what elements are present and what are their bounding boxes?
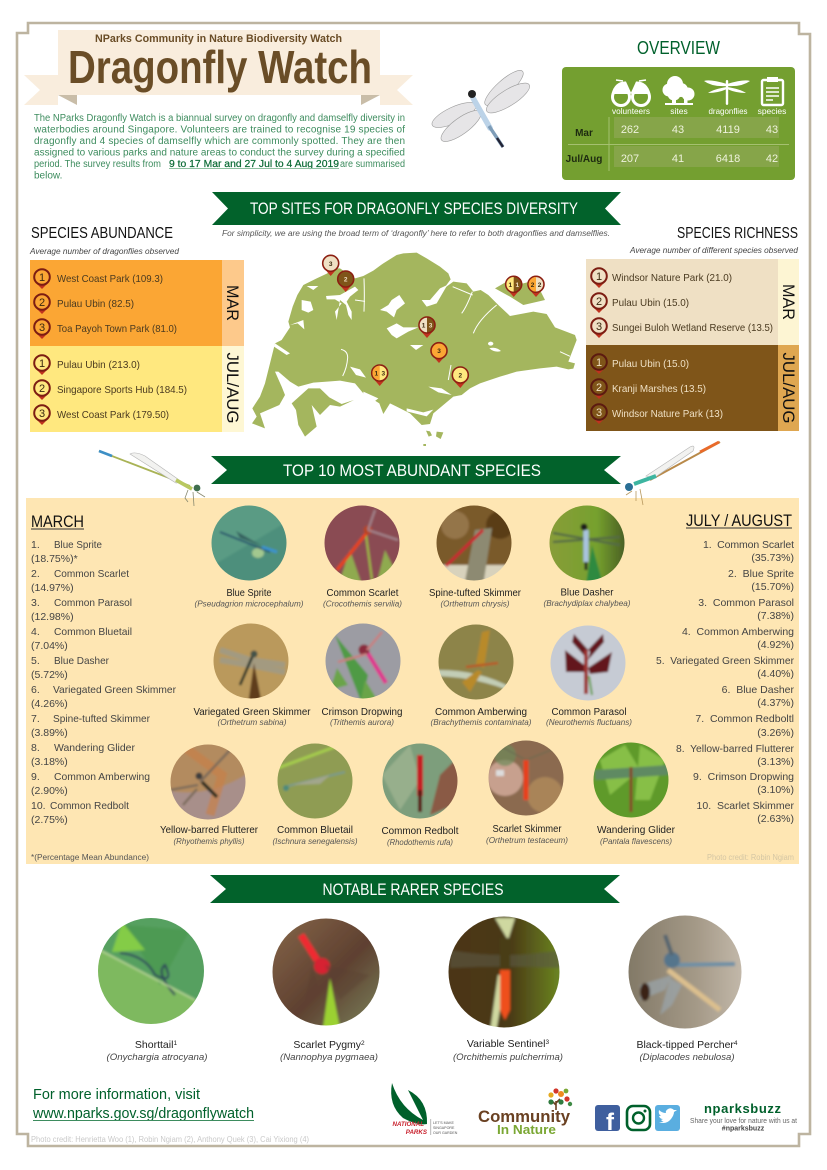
- July/August heading: JULY / AUGUST: [686, 512, 792, 530]
- species captions: bottom row: Common Bluetail: [277, 824, 353, 836]
- overview panel: [562, 67, 795, 180]
- map pin: Toa Payoh 3: [431, 343, 447, 363]
- panel: richness March: MAR: [779, 284, 798, 320]
- March ranks: Spine-tufted Skimmer: [53, 713, 150, 725]
- species captions: middle row: Common Parasol: [552, 706, 626, 718]
- photo: Common Scarlet: [324, 506, 400, 580]
- overview March row: Mar: [575, 128, 593, 139]
- photo: Scarlet Pygmy: [272, 918, 380, 1026]
- caption: Variable Sentinel: 3: [545, 1039, 549, 1046]
- rank 3 abundance Jul/Aug: 3: [39, 408, 45, 420]
- caption: Variable Sentinel: Variable Sentinel: [467, 1038, 545, 1050]
- photo: Variegated Green Skimmer: [214, 624, 288, 698]
- map of Singapore: [252, 253, 577, 446]
- map pin: Sports Hub 2: 2: [458, 372, 462, 380]
- overview column headers: dragonflies: [708, 106, 748, 116]
- caption: Black-tipped Percher: Black-tipped Percher: [636, 1039, 734, 1051]
- icon: dragonfly: [704, 80, 750, 105]
- logo: National Parks: PARKS: [406, 1129, 428, 1136]
- intro paragraph: below.: [34, 170, 62, 182]
- March ranks: Blue Dasher: [54, 655, 109, 667]
- caption: Scarlet Pygmy: [280, 1039, 378, 1063]
- rank 1 richness Jul/Aug: 1: [596, 357, 602, 369]
- July/August ranks: (7.38%): [757, 610, 794, 622]
- panel: abundance March: MAR: [223, 285, 242, 321]
- ribbon: top sites: TOP SITES FOR DRAGONFLY SPECIES DIVERSITY: [250, 199, 578, 218]
- rank 3 richness March: 3: [596, 321, 602, 333]
- rank 3 abundance March: [34, 319, 177, 339]
- July/August ranks: 6. Blue Dasher: [722, 684, 795, 696]
- overview March row: 4119: [716, 124, 740, 136]
- footer: more information: For more information, visit: [33, 1086, 201, 1103]
- ribbon: top sites: [212, 192, 621, 225]
- photo: Common Bluetail: [278, 744, 352, 818]
- panel: abundance Jul/Aug: [30, 346, 244, 432]
- icon: Facebook: [595, 1105, 620, 1136]
- footnote: *(Percentage Mean Abundance): [31, 852, 149, 862]
- overview Jul/Aug row: 207: [621, 153, 639, 165]
- March ranks: 1.: [31, 539, 40, 551]
- species captions: middle row: Crimson Dropwing: [322, 706, 403, 718]
- icon: clipboard: [762, 77, 783, 105]
- photo: Spine-tufted Skimmer: [436, 506, 512, 580]
- March ranks: (7.04%): [31, 640, 68, 652]
- rank 2 richness March: Pulau Ubin (15.0): [612, 297, 689, 309]
- rank 1 abundance March: 1: [39, 272, 45, 284]
- list: July/August top 10: [656, 512, 795, 825]
- July/August ranks: (3.13%): [757, 756, 794, 768]
- nparksbuzz text: nparksbuzz: [704, 1101, 782, 1116]
- overview Jul/Aug row: Jul/Aug: [566, 154, 602, 165]
- species captions: top row: Blue Dasher: [560, 586, 614, 598]
- March ranks: Variegated Green Skimmer: [53, 684, 176, 696]
- July/August ranks: 3. Common Parasol: [698, 597, 794, 609]
- rank 2 richness Jul/Aug: [591, 379, 706, 399]
- July/August ranks: (4.92%): [757, 639, 794, 651]
- nparksbuzz text: [690, 1101, 797, 1132]
- ribbon: top 10 species: TOP 10 MOST ABUNDANT SPECIES: [283, 461, 541, 480]
- species captions: middle row: [194, 706, 632, 727]
- caption: Scarlet Pygmy: Scarlet Pygmy: [293, 1039, 361, 1051]
- July/August ranks: 8. Yellow-barred Flutterer: [676, 743, 794, 755]
- icon: trees: [662, 76, 694, 105]
- July/August ranks: (4.37%): [757, 697, 794, 709]
- map pin: Sports Hub 2: [452, 367, 468, 388]
- March ranks: (4.26%): [31, 698, 68, 710]
- map pin: Ubin 2 2: 2: [531, 282, 535, 289]
- rank 1 richness Jul/Aug: Pulau Ubin (15.0): [612, 358, 689, 370]
- caption: Shorttail: (Onychargia atrocyana): [106, 1052, 208, 1063]
- map pin: Windsor 1 3: [419, 317, 435, 338]
- heading: species abundance: SPECIES ABUNDANCE: [31, 225, 173, 242]
- icon: binoculars: [612, 80, 650, 106]
- ribbon: notable rarer species: NOTABLE RARER SPECIES: [322, 880, 504, 899]
- July/August ranks: 4. Common Amberwing: [682, 626, 794, 638]
- intro paragraph: assigned to various parks and nature areas to conduct the survey during a specified: [34, 148, 405, 158]
- March ranks: [31, 539, 176, 826]
- intro paragraph: period. The survey results from: [34, 159, 161, 170]
- species captions: top row: (Orthetrum chrysis): [440, 598, 510, 608]
- March ranks: (2.75%): [31, 814, 68, 826]
- July/August ranks: (35.73%): [751, 552, 794, 564]
- rank 3 abundance March: Toa Payoh Town Park (81.0): [57, 323, 177, 335]
- July/August ranks: 5. Variegated Green Skimmer: [656, 655, 794, 667]
- overview column headers: volunteers: [612, 106, 650, 116]
- March heading: MARCH: [31, 513, 84, 531]
- map pin: Kranji 2: [338, 271, 354, 292]
- rank 1 richness March: Windsor Nature Park (21.0): [612, 272, 732, 284]
- logo: Community in Nature: [478, 1088, 572, 1137]
- species captions: bottom row: (Pantala flavescens): [600, 836, 672, 846]
- rank 1 abundance Jul/Aug: 1: [39, 358, 45, 370]
- March ranks: (3.89%): [31, 727, 68, 739]
- rank 2 abundance Jul/Aug: 2: [39, 383, 45, 395]
- photo: Wandering Glider: [594, 742, 668, 818]
- March ranks: Blue Sprite: [54, 539, 102, 551]
- map pin: West Coast Park 1 3: 1: [374, 370, 378, 378]
- species captions: bottom row: Scarlet Skimmer: [492, 823, 562, 835]
- rank 3 richness March: [591, 318, 773, 338]
- list: March top 10: [31, 513, 176, 826]
- rank 1 richness Jul/Aug: [591, 354, 689, 374]
- rank 2 abundance Jul/Aug: [34, 380, 187, 400]
- March ranks: 6.: [31, 684, 40, 696]
- March ranks: (14.97%): [31, 582, 74, 594]
- March ranks: 10.: [31, 800, 46, 812]
- July/August ranks: (15.70%): [751, 581, 794, 593]
- panel: richness Jul/Aug: [586, 345, 799, 431]
- photo: Shorttail: [98, 918, 204, 1024]
- March ranks: Common Parasol: [54, 597, 132, 609]
- March ranks: (18.75%)*: [31, 553, 78, 565]
- footer photo credit: Photo credit: Henrietta Woo (1), Robin Ngiam (2), Anthony Quek (3), Cai Yixiong (4): [31, 1135, 309, 1144]
- caption: Variable Sentinel: (Orchithemis pulcherrima): [453, 1052, 563, 1063]
- photo: Black-tipped Percher: [628, 916, 742, 1028]
- logo: National Parks: OUR GARDEN: [433, 1131, 458, 1135]
- overview column headers: [612, 106, 786, 116]
- July/August ranks: [656, 539, 795, 825]
- intro paragraph: dragonfly and 4 species of damselfly which are commonly spotted. They are then: [34, 136, 405, 147]
- map pin: West Coast 3: [323, 255, 339, 276]
- March ranks: 9.: [31, 771, 40, 783]
- species captions: top row: (Crocothemis servilia): [323, 598, 402, 608]
- species captions: bottom row: [160, 823, 675, 847]
- photo: Common Redbolt: [382, 744, 458, 818]
- species captions: top row: Spine-tufted Skimmer: [429, 587, 521, 599]
- overview March row: 262: [621, 124, 639, 136]
- rank 3 richness Jul/Aug: Windsor Nature Park (13): [612, 408, 723, 420]
- March ranks: Common Bluetail: [54, 626, 132, 638]
- rank 3 richness Jul/Aug: [591, 404, 723, 424]
- caption: Shorttail: 1: [173, 1040, 177, 1047]
- map pin: West Coast Park 1 3: 3: [381, 370, 385, 378]
- map pin: West Coast Park 1 3: [372, 365, 388, 386]
- July/August ranks: (4.40%): [757, 668, 794, 680]
- March ranks: 4.: [31, 626, 40, 638]
- March ranks: Common Scarlet: [54, 568, 129, 580]
- rank 1 abundance March: West Coast Park (109.3): [57, 273, 163, 285]
- caption: Black-tipped Percher: [636, 1039, 738, 1063]
- intro paragraph: 9 to 17 Mar and 27 Jul to 4 Aug 2019: [169, 159, 339, 170]
- photo: Common Amberwing: [438, 624, 514, 700]
- photo: Crimson Dropwing: [326, 624, 400, 698]
- photo: Variable Sentinel: [448, 916, 560, 1028]
- species captions: middle row: (Trithemis aurora): [330, 717, 394, 727]
- rank 3 richness Jul/Aug: 3: [596, 407, 602, 419]
- caption: richness: Average number of different species observed: [629, 245, 798, 255]
- March ranks: (3.18%): [31, 756, 68, 768]
- March ranks: (5.72%): [31, 669, 68, 681]
- March ranks: 2.: [31, 568, 40, 580]
- icon: Twitter: [655, 1105, 680, 1131]
- rank 3 abundance Jul/Aug: West Coast Park (179.50): [57, 409, 169, 421]
- July/August ranks: (3.26%): [757, 727, 794, 739]
- panel: richness Jul/Aug: JUL/AUG: [779, 352, 798, 424]
- rank 3 abundance March: 3: [39, 322, 45, 334]
- species captions: middle row: Variegated Green Skimmer: [194, 706, 311, 718]
- rank 1 richness March: [591, 268, 732, 288]
- photo: Blue Dasher: [550, 506, 624, 580]
- March ranks: Common Redbolt: [50, 800, 129, 812]
- overview March row: 43: [766, 124, 778, 136]
- overview March row: 43: [672, 124, 684, 136]
- banner subtitle: NParks Community in Nature Biodiversity Watch: [95, 33, 342, 45]
- rank 1 richness March: 1: [596, 271, 602, 283]
- logo: National Parks: LET'S MAKE: [433, 1121, 454, 1125]
- map pin: Ubin 1 1: [506, 276, 522, 297]
- rank 1 abundance March: [34, 269, 163, 289]
- overview heading: OVERVIEW: [637, 38, 720, 58]
- rank 1 abundance Jul/Aug: Pulau Ubin (213.0): [57, 359, 140, 371]
- overview Jul/Aug row: 41: [672, 153, 684, 165]
- March ranks: 8.: [31, 742, 40, 754]
- overview Jul/Aug row: 42: [766, 153, 778, 165]
- rank 2 abundance March: [34, 294, 134, 314]
- rank 2 richness Jul/Aug: Kranji Marshes (13.5): [612, 383, 706, 395]
- July/August ranks: (2.63%): [757, 813, 794, 825]
- main title: Dragonfly Watch: [68, 41, 372, 93]
- rank 3 abundance Jul/Aug: [34, 405, 169, 425]
- caption: abundance: Average number of dragonflies observed: [29, 246, 179, 256]
- species captions: bottom row: (Orthetrum testaceum): [486, 835, 568, 845]
- overview column headers: sites: [670, 106, 688, 116]
- March ranks: Wandering Glider: [54, 742, 135, 754]
- nparksbuzz text: #nparksbuzz: [722, 1126, 765, 1132]
- nparksbuzz text: Share your love for nature with us at: [690, 1116, 797, 1125]
- March ranks: (12.98%): [31, 611, 74, 623]
- species captions: middle row: Common Amberwing: [435, 706, 527, 718]
- map pin: Ubin 1 1: 1: [508, 282, 512, 289]
- overview column headers: species: [758, 106, 786, 116]
- illustration: damselfly right: [625, 442, 720, 505]
- July/August ranks: 2. Blue Sprite: [728, 568, 794, 580]
- map pin: Ubin 2 2: [528, 276, 544, 297]
- logo: National Parks: NATIONAL: [392, 1121, 424, 1128]
- map pin: Ubin 1 1: 1: [515, 282, 519, 289]
- caption: Scarlet Pygmy: (Nannophya pygmaea): [280, 1052, 378, 1063]
- species captions: bottom row: (Ischnura senegalensis): [272, 836, 358, 846]
- March ranks: 5.: [31, 655, 40, 667]
- photo: Blue Sprite: [212, 506, 286, 580]
- species panel background: [26, 498, 799, 864]
- footer: more information: [32, 1086, 254, 1122]
- July/August ranks: (3.10%): [757, 784, 794, 796]
- photo: Yellow-barred Flutterer: [170, 744, 246, 820]
- logo: Community in Nature: Community: [478, 1107, 571, 1126]
- panel: richness March: [586, 259, 799, 345]
- rank 2 richness March: 2: [596, 296, 602, 308]
- icon: Instagram: [627, 1106, 650, 1130]
- logo: Community in Nature: In Nature: [497, 1123, 556, 1137]
- rank 2 richness March: [591, 293, 689, 313]
- species captions: bottom row: (Rhodothemis rufa): [387, 837, 453, 847]
- rank 1 abundance Jul/Aug: [34, 355, 140, 375]
- rank 2 abundance Jul/Aug: Singapore Sports Hub (184.5): [57, 384, 187, 396]
- July/August ranks: 1. Common Scarlet: [703, 539, 794, 551]
- caption: Shorttail: [106, 1039, 208, 1063]
- caption: Shorttail: Shorttail: [135, 1039, 173, 1051]
- map pin: Windsor 1 3: 3: [429, 323, 433, 330]
- ribbon: notable rarer species: [210, 875, 620, 903]
- map pin: West Coast 3: 3: [329, 261, 333, 268]
- caption: Scarlet Pygmy: 2: [361, 1040, 365, 1047]
- map pin: Ubin 2 2: 2: [538, 282, 542, 289]
- caption: Variable Sentinel: [453, 1038, 563, 1063]
- caption: Black-tipped Percher: 4: [734, 1040, 738, 1047]
- note on terminology: For simplicity, we are using the broad term of ‘dragonfly’ here to refer to both dragonflies and damselflies.: [222, 228, 610, 238]
- map pin: Kranji 2: 2: [344, 276, 348, 284]
- rank 2 richness Jul/Aug: 2: [596, 382, 602, 394]
- species captions: bottom row: Wandering Glider: [597, 824, 675, 836]
- July/August ranks: 10. Scarlet Skimmer: [697, 800, 794, 812]
- species captions: bottom row: Yellow-barred Flutterer: [160, 824, 258, 836]
- species captions: top row: Blue Sprite: [226, 587, 272, 599]
- rank 3 richness March: Sungei Buloh Wetland Reserve (13.5): [612, 322, 773, 334]
- March ranks: 7.: [31, 713, 40, 725]
- ribbon: top 10 species: [211, 456, 621, 484]
- title banner: [24, 30, 413, 105]
- species captions: top row: (Brachydiplax chalybea): [544, 598, 631, 608]
- July/August ranks: 7. Common Redboltl: [695, 713, 794, 725]
- intro paragraph: are summarised: [340, 159, 405, 170]
- species captions: middle row: (Neurothemis fluctuans): [546, 717, 632, 727]
- species captions: top row: (Pseudagrion microcephalum): [194, 598, 304, 608]
- species captions: bottom row: (Rhyothemis phyllis): [174, 836, 245, 846]
- overview Jul/Aug row: 6418: [716, 153, 740, 165]
- intro paragraph: waterbodies around Singapore. Volunteers are trained to recognise 19 species of: [33, 124, 405, 136]
- logo: National Parks: SINGAPORE: [433, 1126, 455, 1130]
- species captions: bottom row: Common Redbolt: [382, 825, 459, 837]
- rank 2 abundance March: 2: [39, 297, 45, 309]
- intro paragraph: The NParks Dragonfly Watch is a biannual survey on dragonfly and damselfly diversity in: [34, 113, 405, 124]
- March ranks: (2.90%): [31, 785, 68, 797]
- species captions: middle row: (Orthetrum sabina): [218, 717, 287, 727]
- overview March row: [575, 124, 778, 139]
- map pin: Toa Payoh 3: 3: [437, 348, 441, 355]
- map pin: Windsor 1 3: 1: [422, 323, 426, 330]
- panel: abundance Jul/Aug: JUL/AUG: [223, 352, 242, 424]
- species captions: middle row: (Brachythemis contaminata): [430, 717, 532, 727]
- icon: Facebook: f: [606, 1109, 615, 1136]
- July/August ranks: 9. Crimson Dropwing: [693, 771, 794, 783]
- illustration: blue dragonfly: [429, 66, 533, 147]
- intro paragraph: [33, 113, 405, 182]
- caption: Black-tipped Percher: (Diplacodes nebulosa): [640, 1052, 734, 1063]
- logo: National Parks: [391, 1083, 458, 1136]
- species captions: top row: [194, 586, 631, 608]
- illustration: damselfly left: [99, 451, 205, 506]
- photo: Scarlet Skimmer: [488, 740, 564, 816]
- March ranks: Common Amberwing: [54, 771, 150, 783]
- panel: abundance March: [30, 260, 244, 346]
- photo credit: Photo credit: Robin Ngiam: [707, 852, 794, 862]
- rank 2 abundance March: Pulau Ubin (82.5): [57, 298, 134, 310]
- photo: Common Parasol: [550, 626, 626, 700]
- footer: more information: www.nparks.gov.sg/dragonflywatch: [32, 1105, 254, 1122]
- March ranks: 3.: [31, 597, 40, 609]
- species captions: top row: Common Scarlet: [326, 587, 399, 599]
- overview Jul/Aug row: [566, 153, 778, 165]
